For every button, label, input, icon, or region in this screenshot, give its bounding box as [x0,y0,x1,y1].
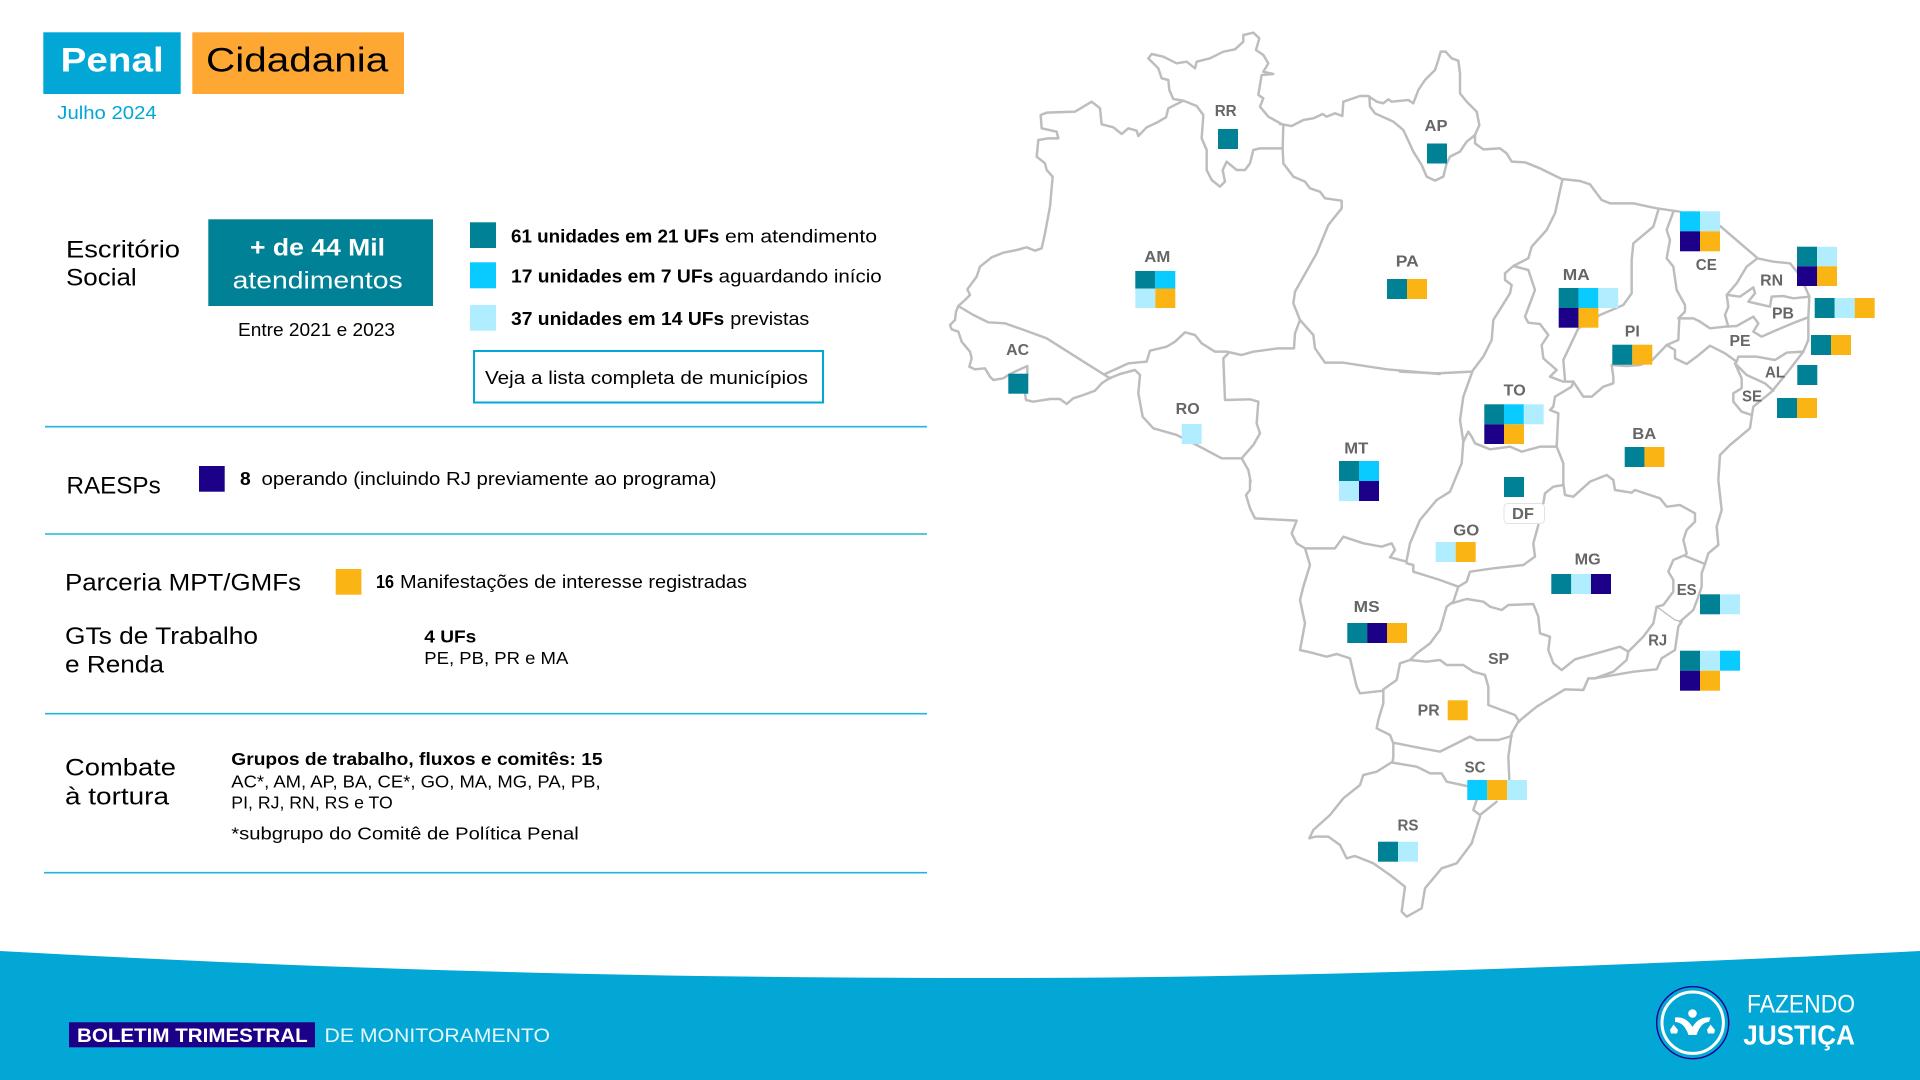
heading: Escritório Social: Escritório [66,237,180,264]
state: MS: MS [1354,599,1380,616]
RAESPs count text: 8 [240,469,251,489]
legend: previstas: previstas [730,309,809,329]
state: RO [1176,401,1202,444]
state: DF [1504,477,1544,524]
state: RS [1378,817,1418,862]
footer label: boletim: BOLETIM TRIMESTRAL [77,1025,308,1047]
state: AC: AC [1006,342,1029,359]
state: MG: MG [1575,551,1601,568]
state: MA [1559,267,1618,328]
panel: Combate à tortura [65,749,603,843]
heading: RAESPs: RAESPs [66,472,161,499]
state: PE: PE [1730,333,1750,350]
tag: Penal [43,32,181,94]
Combate text: Grupos de trabalho, fluxos e comitês: 15 [231,749,603,769]
state: AP: AP [1424,118,1448,135]
callout: atendimentos [208,219,433,306]
state: SE [1742,389,1817,418]
state: ES [1677,582,1740,614]
legend: aguardando início: 17 unidades em 7 UFs [511,266,713,286]
state: SC: SC [1464,759,1486,776]
map: Brazil state outlines [950,33,1809,917]
panel: RAESPs [66,466,716,499]
state: BA: BA [1632,426,1656,443]
state: SE: SE [1742,389,1762,406]
button: lista de municípios [474,351,823,402]
state: AL [1765,365,1817,385]
state: AP [1424,118,1448,164]
state: PI [1612,324,1652,365]
callout: atendimentos: + de 44 Mil [250,234,385,261]
logo: Fazendo Justiça: FAZENDO [1747,990,1855,1018]
tag: Cidadania: Cidadania [206,42,388,80]
tag: Penal: Penal [61,42,164,80]
state: SP: SP [1488,651,1509,668]
heading: Escritório Social [66,237,180,292]
state: SC [1464,759,1527,800]
heading: Escritório Social: Social [66,265,137,292]
legend: em atendimento: em atendimento [725,226,877,246]
heading: Combate à tortura [65,754,176,811]
GTs states text: 4 UFs [424,627,477,647]
GTs states text: PE, PB, PR e MA [424,648,569,668]
state: MS [1347,599,1407,643]
state: AC [1006,342,1029,394]
state: MT: MT [1344,441,1369,458]
state: CE: CE [1696,257,1717,274]
logo: Fazendo Justiça [1657,987,1855,1059]
Combate text [231,749,603,843]
legend: previstas [470,305,809,331]
legend square: Parceria [336,569,361,595]
state: AL: AL [1765,365,1785,382]
state: CE [1680,211,1720,274]
state: PE [1730,333,1851,355]
state: PR: PR [1418,702,1440,719]
state: ES: ES [1677,582,1697,599]
state: PR [1418,700,1468,720]
state: BA [1625,426,1664,467]
state: PA: PA [1396,254,1419,271]
title tags [43,32,404,94]
state: RN [1760,247,1837,290]
footer label: boletim: DE MONITORAMENTO [324,1025,550,1047]
Parceria count text: 16 [376,572,394,592]
state: MA: MA [1563,267,1590,284]
state: GO [1436,522,1479,562]
state: RS: RS [1398,817,1418,834]
callout: atendimentos: atendimentos [233,268,403,295]
legend: previstas: 37 unidades em 14 UFs [511,309,724,329]
state: AM: AM [1144,249,1170,266]
tag: Cidadania [192,32,404,94]
state: PB [1772,298,1875,323]
state: MG [1551,551,1611,594]
heading: Combate à tortura: à tortura [65,784,170,811]
legend: em atendimento [470,222,877,248]
state: AM [1135,249,1175,308]
state: RJ: RJ [1648,633,1667,650]
legend: em atendimento: 61 unidades em 21 UFs [511,226,719,246]
Combate text: PI, RJ, RN, RS e TO [231,793,393,813]
panel: Escritório Social [66,219,882,402]
state: PI: PI [1625,324,1640,341]
Combate text: *subgrupo do Comitê de Política Penal [231,823,579,843]
button: lista de municípios: Veja a lista completa de municípios [485,368,808,388]
heading: GTs de Trabalho e Renda [65,623,258,679]
state: PA [1387,254,1427,299]
Combate text: AC*, AM, AP, BA, CE*, GO, MA, MG, PA, PB, [231,771,601,791]
footer band [0,951,1920,1080]
heading: Parceria MPT/GMFs: Parceria MPT/GMFs [65,570,301,597]
state: TO: TO [1504,382,1526,399]
state: TO [1484,382,1544,444]
legend: aguardando início: aguardando início [719,266,882,286]
legend square: RAESPs [199,466,225,492]
period note: Entre 2021 e 2023 [238,320,395,340]
heading: GTs de Trabalho e Renda: e Renda [65,652,165,679]
logo: Fazendo Justiça: JUSTIÇA [1743,1019,1855,1050]
state: RR [1215,103,1238,149]
state: MT [1339,441,1379,501]
panel: Parceria MPT/GMFs [65,569,747,679]
GTs states text [424,627,569,668]
legend: aguardando início [470,262,882,288]
state: PB: PB [1772,306,1794,323]
Parceria count text: Manifestações de interesse registradas [400,572,747,592]
footer label: boletim [69,1022,550,1047]
state: GO: GO [1453,522,1479,539]
state: RJ [1648,633,1740,691]
heading: GTs de Trabalho e Renda: GTs de Trabalho [65,623,258,650]
state: DF: DF [1512,506,1534,523]
state: RR: RR [1215,103,1237,120]
state: RO: RO [1176,401,1200,418]
RAESPs count text: operando (incluindo RJ previamente ao programa) [262,469,716,489]
state: RN: RN [1760,273,1783,290]
date: Julho 2024 [57,103,157,123]
heading: Combate à tortura: Combate [65,754,176,781]
